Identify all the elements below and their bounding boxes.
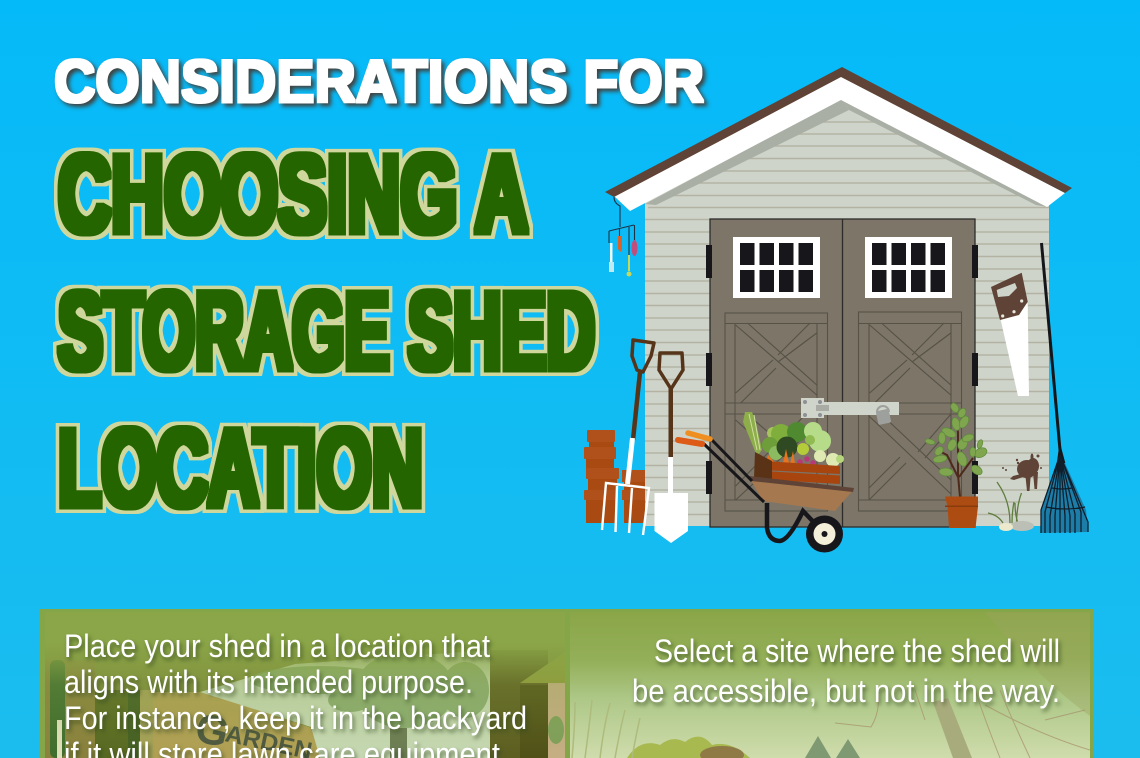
windows xyxy=(733,237,952,298)
shed illustration xyxy=(584,67,1088,552)
wall xyxy=(645,97,1049,526)
heading: considerations for: CONSIDERATIONS FOR xyxy=(54,48,704,115)
right text block xyxy=(632,633,1060,709)
left text block: aligns with its intended purpose. xyxy=(64,664,473,700)
flower pots xyxy=(584,430,645,523)
saw xyxy=(991,273,1029,396)
mud splatter xyxy=(1002,454,1042,491)
wheelbarrow with vegetables xyxy=(678,412,854,552)
door latch xyxy=(801,398,899,425)
potted plant xyxy=(925,402,988,528)
doors xyxy=(710,219,975,527)
photo: garden sign xyxy=(45,650,565,758)
panel: photo strip xyxy=(40,609,1093,758)
right text block: Select a site where the shed will xyxy=(654,633,1060,669)
heading: storage shed: STORAGE SHED xyxy=(58,270,595,393)
garden fork xyxy=(602,340,654,535)
wheel xyxy=(806,516,843,552)
heading: location: LOCATION xyxy=(58,407,423,530)
vegetables xyxy=(743,412,844,467)
photo sign lettering: G xyxy=(191,703,234,757)
hinges xyxy=(706,245,978,494)
spade xyxy=(654,353,688,543)
left text block: Place your shed in a location that xyxy=(64,628,490,664)
photo: trees xyxy=(570,612,1090,758)
left text block xyxy=(64,628,527,758)
crate xyxy=(754,452,840,488)
grass and stones xyxy=(988,482,1034,531)
frame xyxy=(767,503,824,541)
wind mobile xyxy=(609,197,638,276)
heading: choosing a: CHOOSING A xyxy=(58,133,528,256)
handles xyxy=(678,433,764,502)
tray xyxy=(749,476,854,511)
photo sign lettering xyxy=(198,715,312,758)
roof xyxy=(605,67,1072,211)
title xyxy=(54,48,704,530)
left text block: For instance, keep it in the backyard xyxy=(64,700,527,736)
rake xyxy=(1041,243,1088,533)
right text block: be accessible, but not in the way. xyxy=(632,673,1060,709)
